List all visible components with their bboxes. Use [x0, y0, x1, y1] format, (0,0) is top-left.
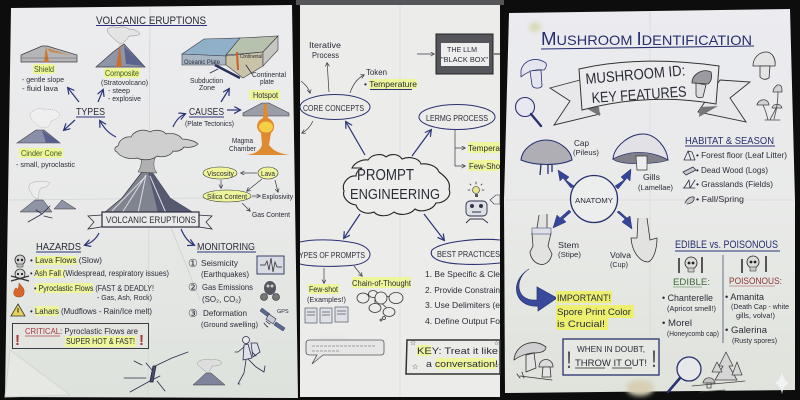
- icon: composite volcano: [96, 27, 145, 67]
- list: best practices: 3. Use Delimiters (e: [425, 300, 500, 310]
- label: shield: [22, 64, 64, 93]
- icon: sparkle: [775, 372, 789, 394]
- list: best practices: 1. Be Specific & Cle: [425, 269, 500, 279]
- label: continental plate: Continental: [252, 72, 286, 79]
- column: edible: (Apricot smell!): [667, 306, 716, 313]
- icon: poisonous skull and utensils: [742, 256, 766, 273]
- title: mushroom identification: MUSHROOM IDENTIFICATION: [541, 29, 752, 49]
- list: lerng process steps: Few-Sho: [469, 161, 500, 171]
- list: habitat: • Grasslands (Fields): [696, 179, 773, 189]
- panel: prompt engineering: [299, 5, 500, 397]
- hazard: pyroclastic flows: • Pyroclastic Flows (FAST & DEADLY!: [34, 284, 154, 293]
- label: shield: - gentle slope: [22, 75, 64, 84]
- icon: lightbulb: [468, 182, 484, 197]
- label: iterative process: [309, 41, 342, 60]
- banner: key features: MUSHROOM ID:: [585, 62, 686, 88]
- heading: monitoring: [181, 229, 256, 253]
- illustration: forest scene: [692, 352, 745, 392]
- callout: critical: CRITICAL: [25, 326, 60, 336]
- list: monitoring: (Earthquakes): [201, 270, 249, 279]
- illustration: cap: (Pileus): [573, 148, 599, 157]
- banner: key features: KEY FEATURES: [591, 83, 687, 107]
- column: edible: EDIBLE:: [673, 277, 710, 288]
- column: poisonous: POISONOUS:: [729, 276, 782, 287]
- label: chain of thought: [352, 266, 412, 288]
- icon: gps satellite: GPS: [277, 309, 289, 315]
- callout: key: ☆: [412, 363, 418, 371]
- panel: mushroom identification: [504, 9, 795, 396]
- callout: when in doubt: [563, 339, 659, 375]
- list: monitoring: Deformation: [203, 308, 247, 318]
- column: poisonous: (Death Cap - white: [731, 304, 789, 311]
- illustration: small volcanoes and crack: [20, 181, 76, 222]
- illustration: stem: [530, 214, 582, 264]
- label: composite: - steep: [108, 86, 130, 95]
- icon: hotspot volcano: [229, 103, 290, 155]
- icon: mushroom cluster: [757, 85, 782, 120]
- column: poisonous: [725, 276, 789, 345]
- hazard: pyroclastic flows: - Gas, Ash, Rock): [97, 293, 152, 302]
- callout: key: ☆: [410, 339, 416, 347]
- label: composite: Composite: [105, 69, 139, 78]
- illustration: cap: Cap: [574, 139, 590, 148]
- icon: robot: [466, 195, 500, 223]
- callout: critical: [12, 324, 148, 349]
- illustration: gills: (Lamellae): [638, 183, 673, 192]
- column: poisonous: • Amanita: [725, 292, 764, 302]
- label: continental plate: plate: [260, 79, 274, 86]
- illustration: volva: [610, 218, 657, 269]
- list: monitoring: (Ground swelling): [201, 320, 258, 329]
- banner: volcanic eruptions: VOLCANIC ERUPTIONS: [106, 215, 196, 225]
- title: volcanic eruptions: VOLCANIC ERUPTIONS: [96, 15, 206, 27]
- diagram: plate tectonics block: [182, 36, 278, 78]
- column: edible: (Honeycomb cap): [667, 331, 719, 338]
- hazard: ash fall: • Ash Fall (Widespread, respiratory issues): [30, 269, 169, 278]
- icon: chat bubble: [306, 340, 384, 364]
- icon: banner mushroom: [692, 71, 712, 98]
- callout: critical: : Pyroclastic Flows are: [60, 327, 139, 336]
- diagram: plate tectonics block: Continental: [240, 54, 262, 60]
- node: lerng process: LERMG PROCESS: [426, 114, 488, 123]
- node: lerng process: [419, 104, 495, 130]
- callout: when in doubt: !: [651, 346, 657, 373]
- icon: thought bubbles: [357, 290, 403, 321]
- divider and skull icons: [679, 255, 766, 343]
- list: monitoring: (SO₂, CO₂): [202, 295, 241, 304]
- diagram: plate tectonics block: Oceanic Plate: [184, 60, 221, 66]
- node: anatomy with arrows: [553, 169, 632, 229]
- arrow: curved important: [516, 269, 557, 311]
- label: composite: - explosive: [108, 94, 141, 103]
- diagram: lava viscosity flow: Silica Content: [207, 192, 248, 201]
- label: causes: CAUSES: [189, 106, 224, 118]
- node: prompt engineering cloud: PROMPT: [357, 167, 414, 184]
- label: hotspot: Hotspot: [253, 91, 279, 100]
- illustration: stem: (Stipe): [558, 250, 582, 259]
- list: lerng process steps: Tempera: [468, 143, 500, 153]
- list: monitoring: Seismicity: [201, 258, 239, 268]
- column: poisonous: (Rusty spores): [732, 338, 777, 345]
- illustration: main volcano: [104, 130, 198, 213]
- list: monitoring: [188, 258, 258, 329]
- icons: habitat: [683, 151, 696, 204]
- icon: magnifier: [516, 98, 541, 126]
- icon: hotspot volcano: Chamber: [229, 144, 256, 153]
- list: token temperature: [364, 68, 418, 90]
- node: prompt engineering cloud: ENGINEERING: [350, 186, 440, 203]
- diagram: lava viscosity flow: Viscosity: [207, 169, 234, 178]
- callout: key: a conversation!: [426, 359, 498, 370]
- list: monitoring: Gas Emissions: [202, 282, 253, 292]
- list: lerng process steps: [455, 130, 500, 171]
- label: few-shot examples: [307, 268, 346, 304]
- callout: when in doubt: WHEN IN DOUBT,: [577, 344, 645, 354]
- label: few-shot examples: Few-shot: [309, 285, 339, 294]
- illustration: volva: Volva: [610, 251, 632, 260]
- list: best practices: 2. Provide Constrain: [425, 285, 500, 295]
- list: habitat: • Forest floor (Leaf Litter): [696, 150, 787, 160]
- heading: hazards: HAZARDS: [36, 241, 81, 253]
- diagram: lava viscosity flow: Explosivity: [262, 192, 293, 201]
- callout: when in doubt: !: [566, 347, 572, 374]
- hazard: lahars: • Lahars (Mudflows - Rain/Ice melt): [30, 307, 152, 316]
- node: core concepts: CORE CONCEPTS: [303, 104, 364, 113]
- list: monitoring: ③: [188, 308, 198, 320]
- hazard: pyroclastic flows: [34, 283, 154, 302]
- icon: edible skull and utensils: [679, 257, 702, 273]
- column: edible: • Chanterelle: [662, 293, 713, 303]
- list: monitoring: ①: [188, 258, 198, 270]
- callout: critical: SUPER HOT & FAST!: [66, 337, 135, 346]
- icon: hotspot volcano: Magma: [232, 136, 254, 145]
- illustration: cap: [521, 139, 599, 175]
- icons: example documents: [305, 307, 348, 323]
- illustration: volva: (Cup): [610, 260, 628, 269]
- heading: monitoring: MONITORING: [197, 241, 255, 253]
- label: iterative process: Process: [312, 51, 339, 60]
- illustration: small erupting volcano: [193, 359, 225, 385]
- banner: volcanic eruptions: [88, 212, 212, 229]
- icon: mushroom top right: [753, 52, 775, 79]
- list: hazards: [11, 255, 169, 316]
- node: types of prompts: [299, 240, 370, 266]
- heading: habitat and season: HABITAT & SEASON: [685, 136, 774, 147]
- list: habitat: • Fall/Spring: [696, 194, 744, 204]
- label: subduction zone: [190, 69, 223, 92]
- icon: flame: [14, 283, 24, 297]
- diagram: lava viscosity flow: Lava: [261, 169, 276, 178]
- callout: key: ☆: [494, 362, 499, 369]
- label: cinder cone: - small, pyroclastic: [16, 160, 75, 169]
- label: cinder cone: [16, 148, 75, 169]
- arrows: types: [64, 88, 240, 137]
- callout: important: [556, 291, 634, 330]
- list: best practices: 4. Define Output Fo: [425, 316, 500, 326]
- node: types of prompts: YPES OF PROMPTS: [299, 251, 365, 260]
- icon: shield volcano: [21, 46, 77, 62]
- callout: key: ☆: [494, 340, 499, 347]
- node: anatomy with arrows: ANATOMY: [575, 196, 613, 205]
- label: causes: (Plate Tectonics): [185, 119, 234, 128]
- icon: skull and crossbones: [11, 269, 29, 281]
- label: composite: (Stratovolcano): [101, 78, 148, 87]
- callout: important: IMPORTANT!: [557, 293, 611, 304]
- illustration: gills: Gills: [643, 173, 660, 182]
- label: subduction zone: Zone: [199, 85, 215, 92]
- callout: when in doubt: THROW IT OUT!: [575, 358, 647, 368]
- column: edible: [662, 277, 719, 338]
- list: monitoring: ②: [188, 282, 198, 294]
- heading: hazards: [36, 233, 99, 253]
- icon: skull: [15, 255, 25, 267]
- diagram: lava viscosity flow: [203, 167, 293, 219]
- label: shield: - fluid lava: [22, 84, 59, 93]
- heading: edible vs poisonous: EDIBLE vs. POISONOUS: [675, 239, 778, 251]
- illustration: stem: Stem: [558, 241, 579, 250]
- icon: seismograph: [257, 256, 284, 274]
- panel: volcanic eruptions: [5, 5, 298, 398]
- node: best practices: [431, 239, 500, 264]
- node: best practices: BEST PRACTICES: [437, 249, 500, 259]
- illustration: bottom left mushrooms: [514, 343, 553, 380]
- label: composite: [101, 68, 148, 103]
- label: cinder cone: Cinder Cone: [21, 148, 62, 158]
- list: habitat: [696, 150, 787, 204]
- list: token temperature: Token: [366, 68, 387, 77]
- icon: cinder cone: [17, 109, 60, 143]
- icon: mushroom top left: [521, 59, 546, 88]
- callout: important: Spore Print Color: [557, 307, 631, 318]
- illustration: gills: [613, 134, 673, 192]
- icon: large magnifier: [668, 357, 701, 392]
- hazard: lava flows: • Lava Flows (Slow): [30, 255, 102, 265]
- callout: critical: !: [139, 332, 144, 349]
- heading: types: TYPES: [76, 106, 105, 118]
- list: best practices: [425, 269, 500, 326]
- banner: key features: [550, 61, 750, 125]
- box: the llm black box: [417, 34, 500, 74]
- callout: important: is Crucial!: [557, 319, 605, 330]
- label: shield: Shield: [34, 64, 54, 74]
- label: subduction zone: Subduction: [190, 78, 223, 85]
- column: poisonous: gills, volva!): [736, 313, 775, 320]
- label: few-shot examples: (Examples!): [307, 295, 346, 304]
- arrows: core concepts: [301, 63, 444, 240]
- node: core concepts: [300, 94, 370, 120]
- icon: gps satellite: [260, 308, 289, 331]
- label: continental plate: [246, 65, 286, 86]
- callout: critical: !: [15, 332, 20, 349]
- icon: warning triangle: [11, 304, 25, 316]
- callout: key: [406, 339, 500, 374]
- label: chain of thought: Chain-of-Thought: [352, 279, 412, 288]
- list: token temperature: • Temperature: [364, 80, 418, 89]
- column: edible: • Morel: [662, 318, 692, 328]
- illustration: running person: [235, 336, 265, 384]
- box: the llm black box: THE LLM: [447, 45, 477, 54]
- callout: key: KEY: Treat it like: [417, 346, 498, 357]
- icon: gas mask: [260, 281, 280, 300]
- box: the llm black box: "BLACK BOX": [441, 55, 488, 64]
- list: habitat: • Dead Wood (Logs): [696, 165, 768, 175]
- label: iterative process: Iterative: [309, 41, 342, 50]
- node: prompt engineering cloud: [343, 155, 450, 216]
- label: causes: [185, 106, 234, 128]
- diagram: lava viscosity flow: Gas Content: [252, 212, 290, 219]
- illustration: crack in ground: [124, 352, 188, 392]
- column: poisonous: • Galerina: [725, 325, 767, 335]
